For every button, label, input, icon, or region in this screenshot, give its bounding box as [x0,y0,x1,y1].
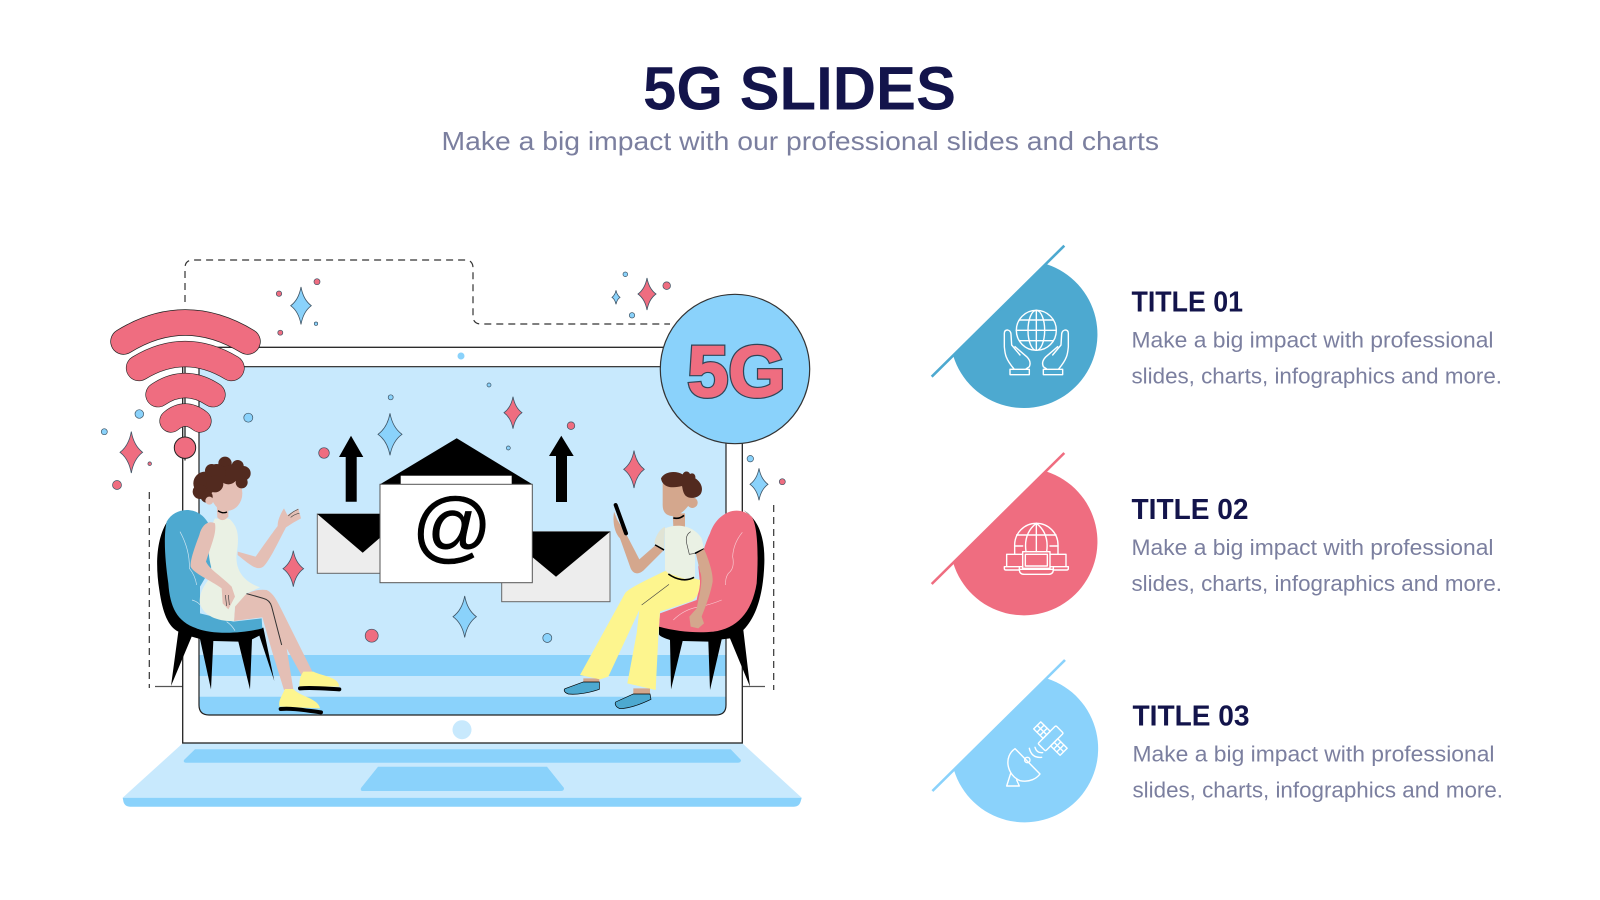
title: 5G SLIDES [643,54,956,122]
chair black frame [157,520,274,689]
trouser crease [642,584,669,605]
man head [661,472,702,518]
ear [687,497,698,508]
icon badge: hands holding globe [932,246,1097,408]
icon badge: globe and laptops [932,453,1097,615]
neck [673,513,685,529]
laptop [123,347,802,807]
screen [199,367,726,715]
woman on blue chair [157,508,339,712]
trackpad [361,767,564,791]
heading 1: TITLE 01 [1132,286,1243,318]
letter inside center envelope [401,476,512,485]
chair black frame [659,510,764,690]
chair highlights [673,532,742,620]
ankles [583,678,650,695]
hair [661,472,702,498]
leg line [246,593,282,645]
chair pink seat [659,511,758,632]
laptop front lip [123,798,802,807]
chair blue seat [165,510,262,633]
legs [234,590,312,690]
item 3 [932,660,1503,822]
sleeve line [686,532,695,554]
webcam dot [458,352,464,360]
item 1 [932,246,1502,408]
hair [193,457,251,503]
trousers [580,571,700,690]
email envelopes [317,438,610,602]
laptop lid [183,347,742,743]
description 2: slides, charts, infographics and more. [1132,571,1502,596]
laptop base [123,743,802,798]
sole back [281,709,321,712]
5G badge: 5G [688,333,786,413]
center envelope card [380,484,532,583]
chair highlights [180,532,235,631]
ear [205,497,213,505]
shirt details [655,545,704,580]
man on pink chair [564,505,764,709]
arm holding phone [614,512,663,573]
right envelope [502,532,610,602]
description 3: Make a big impact with professional [1132,742,1494,766]
sole front [300,688,339,689]
center envelope flap [380,438,532,484]
screen floor bands [199,655,726,715]
keyboard [184,749,741,763]
hand finger lines [225,509,299,606]
left envelope [317,514,407,573]
shoe right [615,694,651,709]
dashed connector outline [185,260,670,324]
neck [217,502,228,520]
phone [616,505,626,533]
description 3: slides, charts, infographics and more. [1132,778,1503,802]
description 2: Make a big impact with professional [1132,535,1494,560]
item 2 [932,453,1502,615]
heading 3: TITLE 03 [1132,700,1250,732]
subtitle: Make a big impact with our professional slides and charts [442,126,1159,156]
icon badge: satellite dish [932,660,1098,822]
screen outline [199,367,726,715]
face [211,476,242,511]
5G badge: 5G [688,333,786,413]
shoe left [564,682,599,694]
home button [452,720,472,739]
description 1: Make a big impact with professional [1132,328,1494,352]
description 1 [1132,328,1502,388]
at sign: @ [412,481,492,570]
neck shadow [673,515,684,518]
shoe front [299,672,339,687]
neck shadow [218,511,227,513]
5G badge [660,294,810,444]
woman head [193,457,251,520]
shoe back [279,689,320,708]
face [663,483,690,516]
heading 2: TITLE 02 [1132,494,1248,526]
description 2 [1132,535,1502,596]
dress [200,518,260,621]
upload arrows [339,436,574,502]
sleeve [654,527,665,550]
resting arm and hand [191,522,235,609]
raised arm and hand [238,508,301,568]
resting arm [689,549,713,628]
wifi symbol [124,322,248,460]
sparkles and dots [101,272,785,642]
illustration: laptop with two people and email [101,260,810,807]
description 1: slides, charts, infographics and more. [1132,364,1502,388]
description 3 [1132,742,1503,802]
dashed guide lines [149,492,774,690]
shirt [665,526,704,580]
